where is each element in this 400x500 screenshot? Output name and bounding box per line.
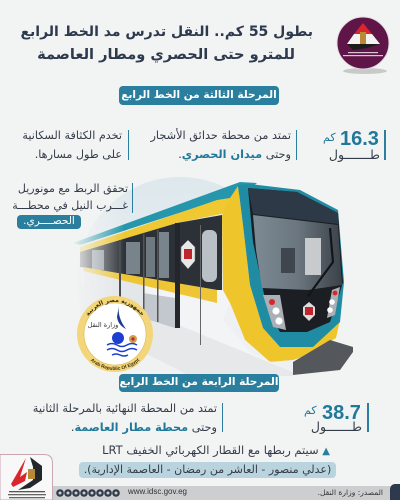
text: monorail link: الحصــــري.	[23, 215, 75, 227]
text: phase four route	[33, 402, 223, 434]
undercarriage	[293, 340, 353, 375]
stat: 16.3 km	[323, 128, 386, 162]
text: population density: تخدم الكثافة السكانية	[22, 129, 122, 142]
logo: ministry of transport: جمهورية مصر العربية	[86, 300, 143, 316]
logo: cabinet IDSC	[336, 16, 390, 74]
footer corner accent	[390, 484, 400, 500]
door posts	[175, 223, 180, 328]
text: phase four route: وحتى محطة مطار العاصمة.	[71, 421, 217, 434]
text: phase three route: تمتد من محطة حدائق الأشجار	[150, 129, 291, 142]
stat: 38.7 km	[304, 402, 369, 434]
text: monorail link: غـــرب النيل في محطـــة	[12, 199, 128, 212]
website: www.idsc.gov.eg	[128, 487, 187, 496]
white skirt	[223, 303, 293, 372]
stat: 16.3 km: كم	[323, 131, 336, 144]
title: بطول 55 كم.. النقل تدرس مد الخط الرابع	[20, 24, 313, 40]
text: phase four route: تمتد من المحطة النهائية بالمرحلة الثانية	[33, 402, 217, 415]
heading: phase three	[119, 86, 279, 105]
heading: phase four: المرحلة الرابعة من الخط الرابع	[120, 376, 278, 388]
text: population density	[22, 129, 129, 161]
front emblem	[303, 302, 315, 321]
source: المصدر: وزارة النقل.	[318, 488, 383, 497]
windshield	[253, 215, 342, 290]
heading: phase four	[119, 374, 279, 392]
cab black	[248, 188, 343, 332]
logo: 40 years IDSC	[0, 454, 53, 500]
footer bar	[0, 486, 400, 500]
text: population density: على طول مسارها.	[35, 148, 122, 161]
text: phase three route	[150, 128, 297, 161]
logo: ministry of transport	[77, 296, 153, 372]
note: LRT stations: (عدلي منصور - العاشر من رمضان - العاصمة الإدارية).	[84, 463, 331, 476]
side yellow strip	[83, 267, 217, 303]
door emblem	[181, 240, 195, 269]
logo: ministry of transport: وزارة النقل	[88, 321, 118, 329]
stat: 38.7 km: طـــــــول	[311, 419, 362, 434]
stat: 16.3 km: 16.3	[340, 128, 379, 150]
hood	[248, 188, 339, 224]
window band	[80, 215, 222, 290]
teal cab band	[238, 184, 344, 347]
note: LRT link: ▲ سيتم ربطها مع القطار الكهربائي الخفيف LRT	[102, 443, 330, 457]
roof teal	[73, 182, 257, 245]
stat: 16.3 km: طـــــــول	[329, 147, 380, 162]
yellow front pillar	[222, 186, 340, 362]
heading: phase three: المرحلة الثالثة من الخط الرابع	[121, 89, 277, 101]
lamp panels	[263, 295, 286, 330]
text: phase three route: وحتى ميدان الحصري.	[178, 148, 291, 161]
stat: 38.7 km: كم	[304, 404, 317, 417]
stat: 38.7 km: 38.7	[322, 402, 361, 424]
platform	[80, 285, 293, 376]
lower body	[80, 262, 293, 372]
title line 2: للمترو حتى الحصري ومطار العاصمة	[37, 46, 295, 63]
text: monorail link: تحقق الربط مع مونوريل	[18, 182, 128, 195]
top yellow band	[80, 198, 230, 252]
logo: ministry of transport: Arab Republic Of Egypt	[90, 358, 140, 370]
text: monorail link	[12, 182, 133, 229]
social icons	[56, 489, 120, 497]
